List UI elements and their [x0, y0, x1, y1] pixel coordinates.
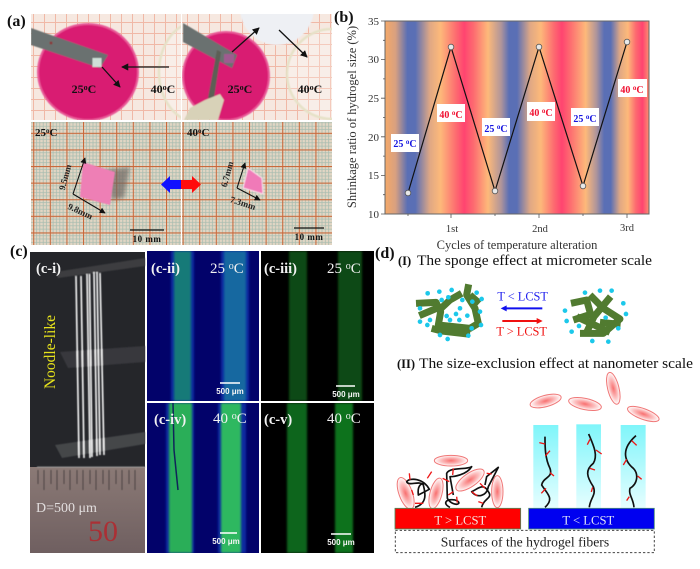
panel: a photographs: [8, 14, 332, 245]
temperature labels: C: [500, 124, 508, 135]
panel: c fiber images: [10, 243, 374, 553]
surface T below LCST: [529, 508, 654, 529]
scale bar c-iv: 500 μm: [212, 537, 240, 546]
photo: hydrogel at 40C on graph paper: 7.3mm: [229, 194, 257, 212]
heading: sponge effect: (I): [398, 254, 411, 268]
label (d): (d): [375, 245, 395, 262]
temperature labels: 40: [620, 85, 630, 96]
y-axis values: 20: [368, 132, 380, 144]
photo: hydrogel at 40C on graph paper: 10 mm: [295, 232, 323, 242]
temperature labels: o: [633, 84, 637, 92]
photo: hydrogel at 25C on graph paper: C: [50, 127, 58, 139]
photo: dish at 25C and 40C with tweezers: o: [240, 83, 244, 92]
temperature labels: o: [542, 107, 546, 115]
label c-ii: (c-ii): [151, 261, 180, 277]
photo: hydrogel at 40C on graph paper: o: [198, 127, 202, 135]
photo: hydrogel at 25C on graph paper: [31, 122, 181, 245]
temperature labels: C: [455, 110, 463, 121]
y-axis values: 15: [368, 170, 380, 182]
scale bar c-iii: [332, 386, 360, 399]
shrunken network: [571, 295, 621, 333]
label T above LCST: T > LCST: [496, 325, 547, 339]
y-axis values: 25: [368, 93, 380, 105]
arrow: red: [502, 318, 543, 324]
label c-iv: (c-iv): [154, 412, 186, 428]
temperature labels: 40: [439, 110, 449, 121]
photo: hydrogel at 40C on graph paper: 40: [187, 127, 198, 139]
surface T below LCST: T < LCST: [562, 513, 615, 527]
temperature c-v: 40: [327, 411, 342, 427]
diagram: size-exclusion effect: [394, 371, 661, 553]
temperature labels: o: [497, 123, 501, 131]
photo: hydrogel at 25C on graph paper: 25: [35, 127, 46, 139]
temperature c-iii: o: [346, 261, 351, 272]
temperature c-ii: C: [234, 261, 244, 277]
photo: dish at 25C and 40C with tweezers: 40: [298, 82, 310, 96]
heading: sponge effect: The sponge effect at micrometer scale: [417, 253, 652, 269]
panel: b shrinkage chart: [334, 9, 649, 252]
temperature labels: o: [586, 113, 590, 121]
y-axis values: 35: [368, 16, 380, 28]
label noodle-like: Noodle-like: [42, 315, 59, 389]
label diameter: D=500 μm: [36, 501, 97, 516]
temperature labels: [391, 79, 647, 152]
adsorbed cells: [394, 455, 503, 511]
label c-i: (c-i): [36, 261, 61, 277]
ruler number: 50: [88, 515, 118, 548]
data line: [408, 42, 627, 193]
extended polymer chains: [542, 434, 637, 507]
label T below LCST: T < LCST: [497, 290, 548, 304]
arrow: blue: [501, 305, 542, 311]
photo: dish at 25C with ruler: o: [163, 83, 167, 92]
photo: hydrogel at 40C on graph paper: [182, 122, 332, 245]
temperature labels: C: [409, 139, 417, 150]
temperature c-iv: C: [237, 411, 247, 427]
photo: dish at 25C with ruler: [31, 14, 181, 120]
temperature labels: C: [545, 108, 553, 119]
x-axis values: [446, 223, 635, 235]
y-axis title: Shrinkage ratio of hydrogel size (%): [345, 26, 359, 208]
photo: dish at 25C and 40C with tweezers: 25: [228, 82, 240, 96]
temperature c-v: C: [351, 411, 361, 427]
collapsed chain side groups: [409, 468, 492, 503]
temperature labels: o: [406, 138, 410, 146]
label (c): (c): [10, 243, 28, 260]
data markers: [405, 39, 630, 196]
water dots, swollen: [418, 288, 484, 341]
photo: c-i noodle-like fibers: [30, 252, 145, 553]
x-axis values: 2nd: [532, 224, 549, 235]
temperature c-iii: C: [351, 261, 361, 277]
photo: dish at 25C and 40C with tweezers: [182, 14, 332, 120]
temperature c-iv: o: [232, 411, 237, 422]
heading: size-exclusion effect: The size-exclusion effect at nanometer scale: [419, 356, 693, 372]
scale bar c-iii: 500 μm: [332, 390, 360, 399]
scale bar c-ii: [216, 383, 244, 396]
temperature labels: C: [636, 85, 644, 96]
temperature c-iii: 25: [327, 261, 342, 277]
photo: hydrogel at 40C on graph paper: 6.7mm: [219, 160, 235, 188]
extended chain side groups: [539, 439, 642, 501]
water dots, shrunken: [563, 288, 628, 344]
micrograph: c-v green channel 40C: [261, 403, 374, 553]
x-axis values: 3rd: [620, 223, 635, 234]
surface T above LCST: [395, 508, 521, 529]
scale bar c-ii: 500 μm: [216, 387, 244, 396]
micrograph: c-ii merged 25C: [147, 251, 259, 401]
temperature labels: 25: [573, 114, 583, 125]
temperature labels: o: [452, 109, 456, 117]
micrograph: c-iii green channel 25C: [261, 251, 374, 401]
heading: size-exclusion effect: (II): [397, 357, 415, 371]
free cells: [529, 371, 661, 425]
y-axis values: 30: [368, 54, 380, 66]
label (b): (b): [334, 9, 354, 26]
diagram: sponge effect: [416, 284, 628, 344]
micrograph: c-iv merged 40C: [147, 403, 259, 553]
x-axis values: 1st: [446, 224, 458, 235]
swollen network: [416, 284, 479, 334]
photo: hydrogel at 40C on graph paper: C: [202, 127, 210, 139]
caption: surfaces of fibers: Surfaces of the hydrogel fibers: [441, 535, 609, 550]
photo: dish at 25C and 40C with tweezers: C: [314, 82, 322, 96]
label (a): (a): [7, 13, 26, 30]
photo: hydrogel at 25C on graph paper: 9.8mm: [66, 201, 95, 222]
panel: d mechanisms: [375, 245, 693, 553]
label c-iii: (c-iii): [264, 261, 297, 277]
photo: dish at 25C with ruler: 40: [151, 82, 163, 96]
collapsed polymer chains: [407, 467, 498, 507]
temperature labels: 40: [529, 108, 539, 119]
temperature labels: 25: [393, 139, 403, 150]
surface T above LCST: T > LCST: [434, 513, 487, 527]
water columns: [533, 424, 646, 508]
scale bar c-v: 500 μm: [327, 538, 355, 547]
photo: dish at 25C and 40C with tweezers: o: [310, 83, 314, 92]
photo: dish at 25C and 40C with tweezers: C: [244, 82, 252, 96]
temperature c-ii: 25: [210, 261, 225, 277]
photo: dish at 25C with ruler: C: [88, 82, 96, 96]
photo: hydrogel at 25C on graph paper: o: [46, 127, 50, 135]
photo: hydrogel at 25C on graph paper: 10 mm: [133, 234, 161, 244]
x-axis title: Cycles of temperature alteration: [437, 238, 598, 252]
temperature c-ii: o: [229, 261, 234, 272]
photo: dish at 25C with ruler: 25: [72, 82, 84, 96]
caption: surfaces of fibers: [395, 530, 654, 553]
photo: hydrogel at 25C on graph paper: 9.5mm: [57, 163, 73, 191]
temperature labels: C: [589, 114, 597, 125]
temperature labels: 25: [484, 124, 494, 135]
photo: dish at 25C with ruler: o: [84, 83, 88, 92]
scale bar c-v: [327, 534, 355, 547]
temperature c-iv: 40: [213, 411, 228, 427]
y-axis values: [368, 16, 380, 221]
label c-v: (c-v): [264, 412, 292, 428]
y-axis values: 10: [368, 209, 380, 221]
temperature c-v: o: [346, 411, 351, 422]
scale bar c-iv: [212, 533, 240, 546]
photo: dish at 25C with ruler: C: [167, 82, 175, 96]
arrow: reversible blue and red: [161, 176, 201, 193]
chart: shrinkage ratio line chart: [345, 16, 649, 252]
